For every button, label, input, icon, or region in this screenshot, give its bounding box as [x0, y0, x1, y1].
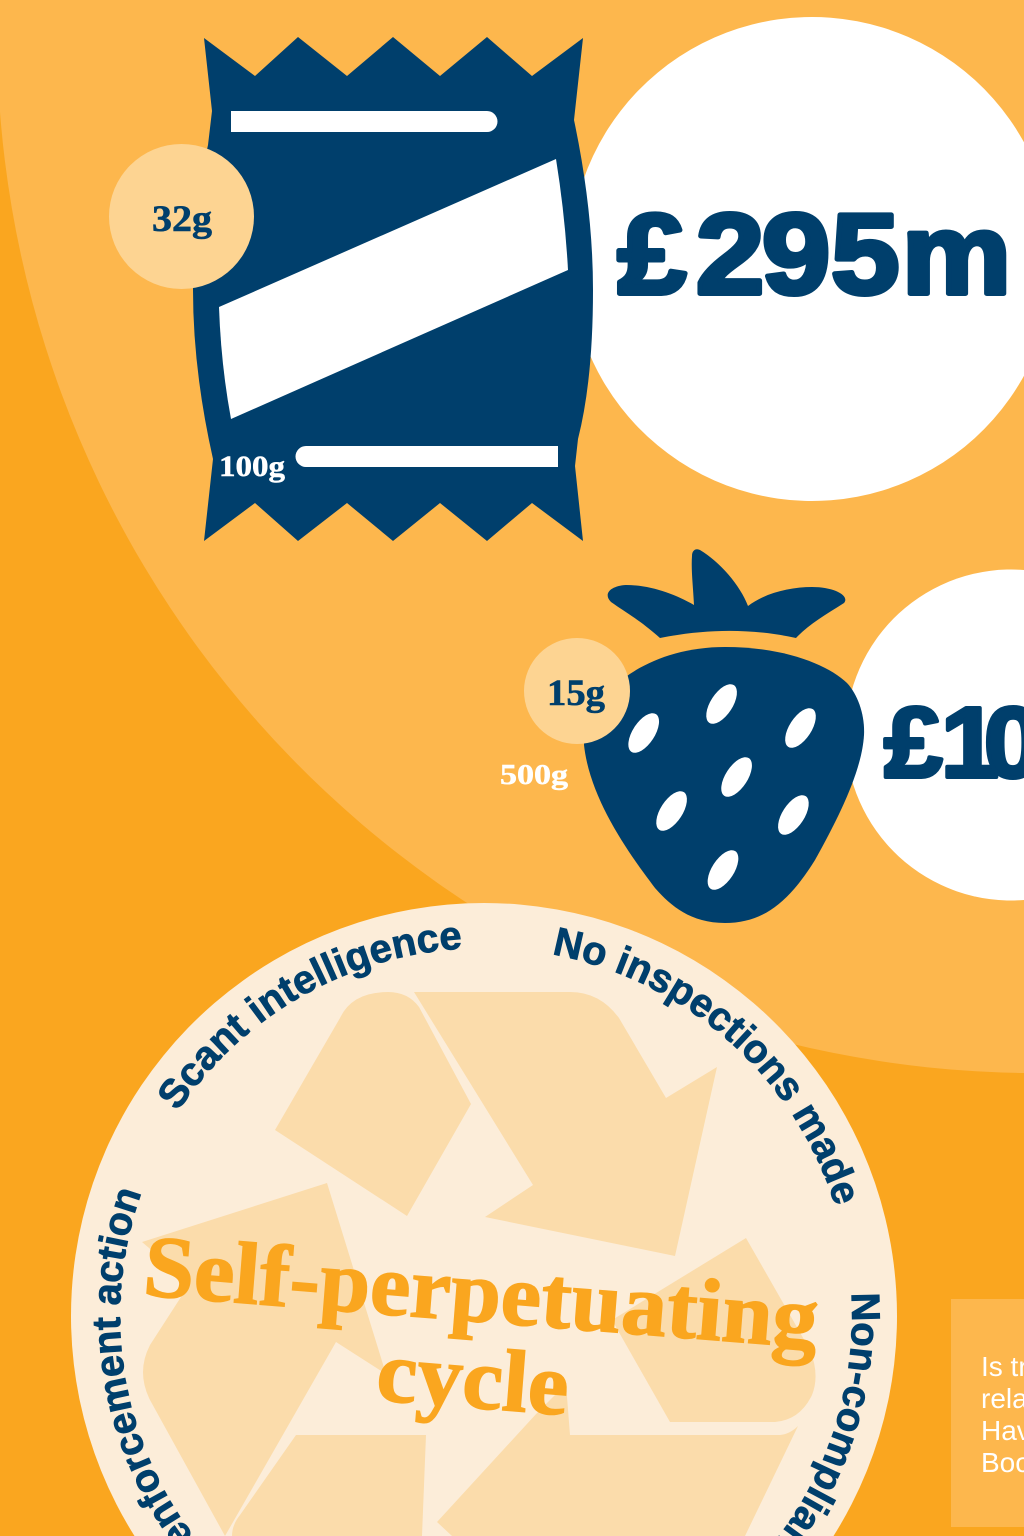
icon: recycling arrows: [142, 992, 816, 1536]
badge: 32g: [109, 144, 254, 289]
curved label: No inspections made: No inspections made: [554, 927, 855, 1204]
strawberry seeds: [622, 679, 822, 895]
icon: crisp packet: [193, 37, 593, 541]
icon: strawberry: [584, 549, 864, 923]
note text: [981, 1351, 1024, 1478]
badge text: 15g: [547, 673, 606, 714]
packet body: [193, 37, 593, 541]
packet diagonal band: [219, 159, 568, 419]
side note box: [951, 1299, 1024, 1527]
packet bottom stripe: [296, 446, 558, 467]
label: 500g: 500g: [500, 759, 569, 791]
note background: [951, 1299, 1024, 1527]
badge: 15g: [524, 638, 630, 744]
cycle disc: [71, 903, 897, 1536]
badge circle: [109, 144, 254, 289]
title: Self-perpetuating cycle: cycle: [373, 1323, 572, 1435]
badge circle: [524, 638, 630, 744]
strawberry leaves: [608, 549, 845, 638]
panel: crisps value: [570, 17, 1024, 501]
white circle: crisps value: [570, 17, 1024, 501]
title: Self-perpetuating cycle: Self-perpetuating: [140, 1218, 822, 1368]
packet top stripe: [231, 111, 498, 132]
large light-orange circle: [0, 0, 1024, 1073]
badge text: 32g: [152, 199, 213, 240]
value: £295m: £295m: [618, 192, 1011, 318]
strawberry body: [584, 647, 864, 923]
title: Self-perpetuating cycle: [140, 1218, 822, 1435]
curved label: Scant intelligence: Scant intelligence: [159, 928, 461, 1108]
white circle: strawberry value: [846, 569, 1024, 900]
panel: strawberry value: [846, 569, 1024, 900]
label: 100g: 100g: [219, 450, 285, 483]
